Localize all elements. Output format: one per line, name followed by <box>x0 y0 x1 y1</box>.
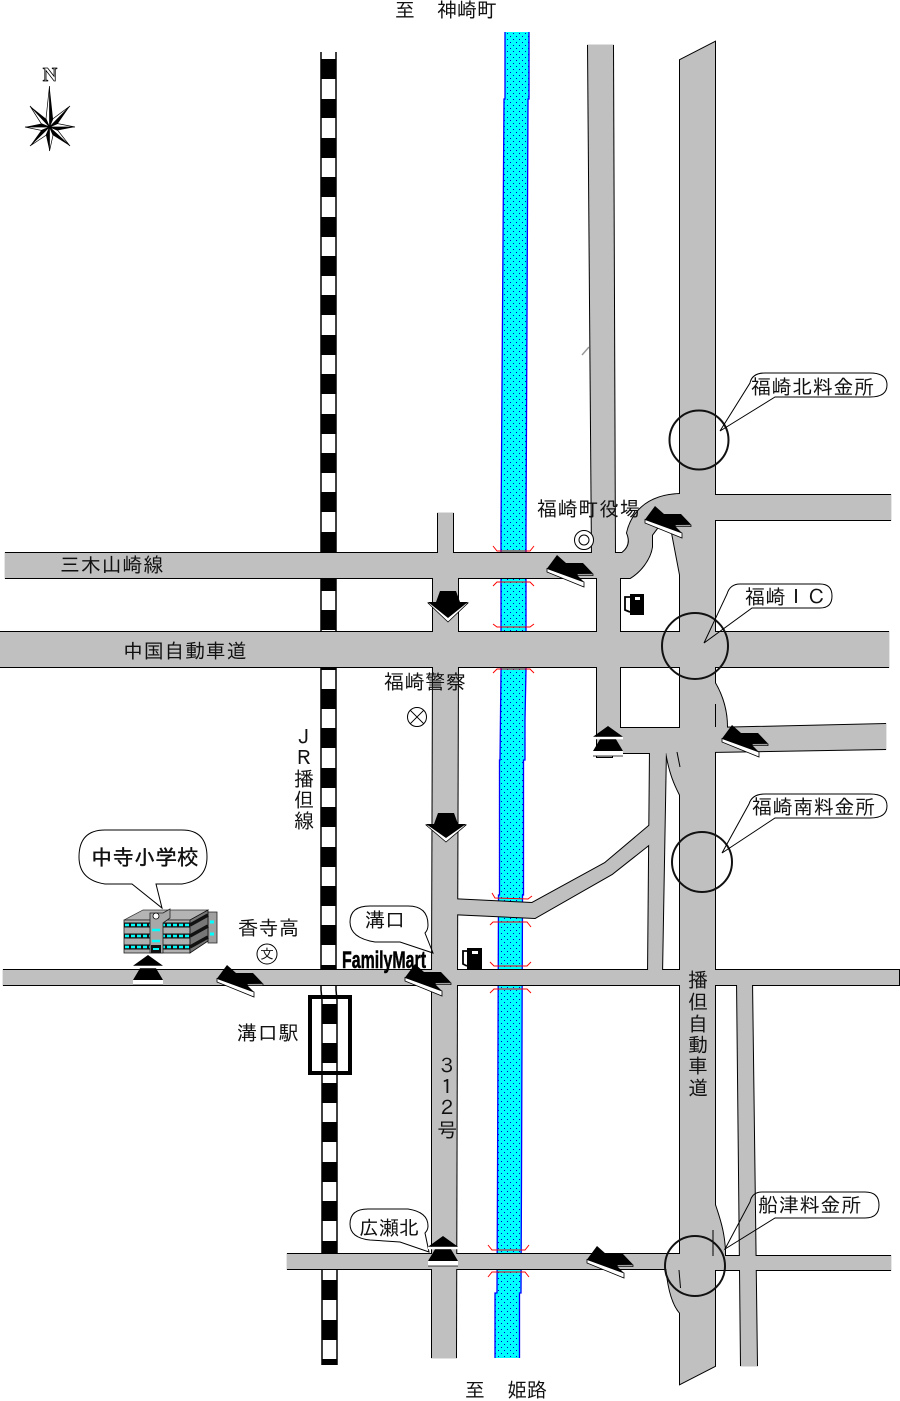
callout: Mizoguchi: 溝口 <box>365 910 405 932</box>
vertical label: Bantan expressway <box>688 970 708 1100</box>
label: Koudera high school: 香寺高 <box>238 918 300 940</box>
heading: Kanzaki town name: 神崎町 <box>437 0 497 22</box>
vertical label: Route 312: 号 <box>437 1120 457 1142</box>
up arrow at Hirose north <box>428 1236 458 1266</box>
left arrow on main road <box>217 965 263 997</box>
callout: Fukusaki north toll: 福崎北料金所 <box>751 377 875 399</box>
vertical label: Route 312: １ <box>437 1077 457 1099</box>
FamilyMart logo: FamilyMart <box>342 947 426 974</box>
callout: Fukusaki south toll <box>722 794 887 853</box>
label: police: 福崎警察 <box>384 672 466 694</box>
callout: Fukusaki north toll <box>720 373 887 431</box>
callout: Fukusaki IC <box>704 584 832 643</box>
icon: school symbol: 文 <box>260 946 274 962</box>
callout: Mizoguchi <box>350 906 433 953</box>
callout: Hirose north <box>350 1209 429 1252</box>
road label: Chugoku expressway: 中国自動車道 <box>123 641 247 663</box>
left arrow on upper ramp <box>645 506 691 538</box>
vertical label: JR Bantan line: 但 <box>294 790 314 812</box>
left arrow on south road <box>587 1246 633 1278</box>
icon: town hall symbol <box>574 530 594 550</box>
vertical label: Route 312: ３ <box>437 1056 457 1078</box>
vertical label: Bantan expressway: 道 <box>688 1078 708 1100</box>
vertical label: JR Bantan line: 播 <box>294 769 314 791</box>
callout: Hirose north: 広瀬北 <box>359 1218 419 1240</box>
vertical label: Bantan expressway: 播 <box>688 970 708 992</box>
vertical label: Bantan expressway: 車 <box>688 1056 708 1078</box>
down arrow south of Miki line <box>428 591 468 622</box>
station box <box>310 997 350 1073</box>
callout: Fukusaki IC: 福崎ＩＣ <box>745 587 827 609</box>
vertical label: Bantan expressway: 自 <box>688 1014 708 1036</box>
left arrow at Mizoguchi junction <box>405 964 451 996</box>
river <box>495 32 529 1358</box>
bridges over the river <box>488 546 534 1277</box>
vertical label: JR Bantan line: Ｒ <box>294 748 314 770</box>
left arrow on Miki line <box>547 555 593 587</box>
vertical label: Bantan expressway: 動 <box>688 1035 708 1057</box>
callout: Nakadera elementary school: 中寺小学校 <box>91 846 198 870</box>
icon: gas station north <box>625 594 644 615</box>
callout: Funatsu toll <box>725 1192 879 1249</box>
vertical label: Route 312: ２ <box>437 1098 457 1120</box>
icon: police symbol <box>408 708 426 726</box>
label: Mizoguchi station: 溝口駅 <box>237 1023 299 1045</box>
up arrow near Fukusaki south <box>593 726 623 756</box>
icon: school symbol <box>257 944 277 964</box>
toll and interchange circles <box>662 410 732 1296</box>
vertical label: JR Bantan line <box>294 727 314 833</box>
compass <box>25 64 75 151</box>
vertical label: Route 312 <box>437 1056 457 1142</box>
callout: Nakadera elementary school <box>79 830 207 908</box>
railway: JR Bantan line <box>321 52 337 1365</box>
compass north letter: N <box>43 64 58 86</box>
vertical label: JR Bantan line: 線 <box>294 811 314 833</box>
left arrow on east branch <box>722 725 768 757</box>
school building icon <box>124 909 217 953</box>
heading: to Kanzaki town: 至 <box>395 0 415 22</box>
callout: Funatsu toll: 船津料金所 <box>758 1195 862 1217</box>
down arrow on route 312 <box>426 813 466 842</box>
icon: gas station south <box>463 948 482 969</box>
label: town hall: 福崎町役場 <box>537 499 640 521</box>
vertical label: JR Bantan line: Ｊ <box>294 727 314 749</box>
callout: Fukusaki south toll: 福崎南料金所 <box>752 797 876 819</box>
road label: Miki Yamasaki line: 三木山崎線 <box>60 555 164 577</box>
vertical label: Bantan expressway: 但 <box>688 992 708 1014</box>
up arrow at school <box>133 955 163 985</box>
